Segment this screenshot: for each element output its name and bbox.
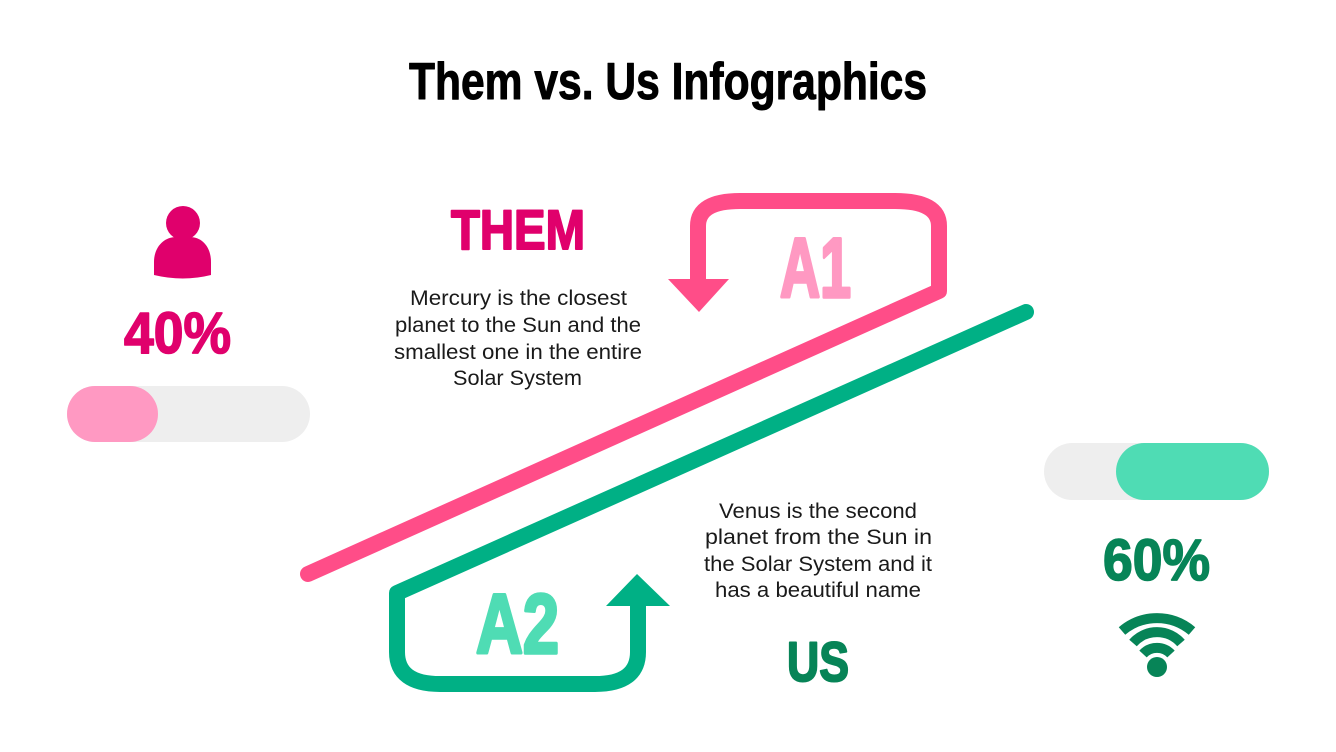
- us description: planet from the Sun in: [705, 525, 932, 549]
- them description: planet to the Sun and the: [395, 313, 641, 337]
- label: A1: A1: [780, 221, 851, 315]
- them percentage: 40%: [124, 301, 231, 366]
- panel: us stats: [1044, 443, 1269, 677]
- us percentage: 60%: [1103, 528, 1210, 593]
- arrow: pink A1 loop: [308, 201, 939, 574]
- them description: [394, 286, 642, 390]
- us description: has a beautiful name: [715, 578, 921, 602]
- us progress bar: [1044, 443, 1269, 500]
- us heading: US: [787, 630, 849, 693]
- them description: Mercury is the closest: [410, 286, 627, 310]
- title: Them vs. Us Infographics: [409, 53, 927, 111]
- icon: person: [154, 206, 211, 278]
- panel: them stats: [67, 206, 310, 442]
- them description: smallest one in the entire: [394, 340, 642, 364]
- us description: the Solar System and it: [704, 552, 932, 576]
- them heading: THEM: [451, 198, 585, 261]
- them description: Solar System: [453, 366, 582, 390]
- arrow: green A2 loop: [397, 312, 1026, 684]
- us description: [704, 499, 932, 602]
- them progress bar: [67, 386, 310, 442]
- label: A2: A2: [476, 577, 559, 671]
- us description: Venus is the second: [719, 499, 917, 523]
- icon: wifi: [1122, 618, 1192, 677]
